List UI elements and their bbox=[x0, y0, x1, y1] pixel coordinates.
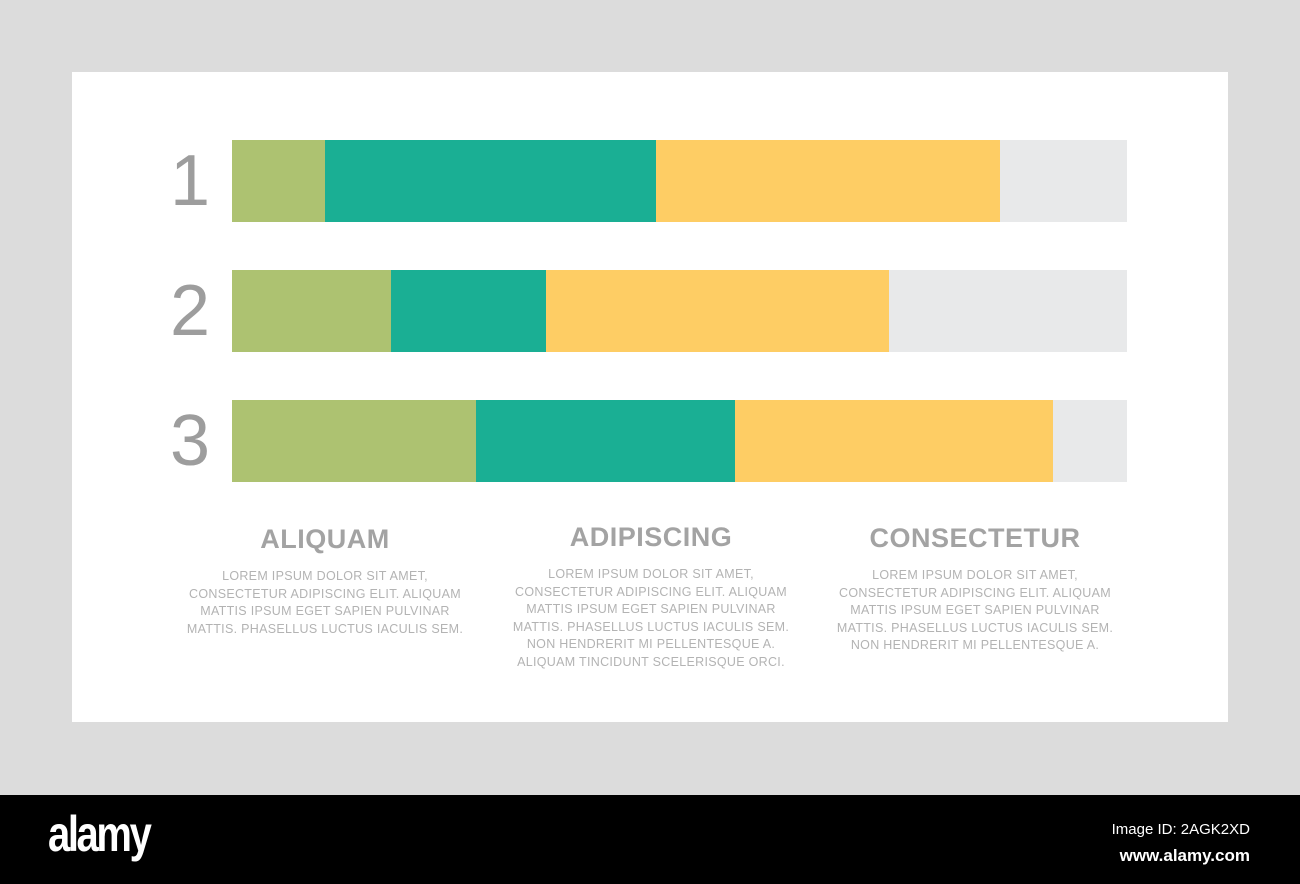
text block: aliquam bbox=[187, 524, 463, 636]
text block: consectetur bbox=[837, 523, 1113, 652]
bar 2 bbox=[232, 270, 1127, 352]
text block: adipiscing: MATTIS. PHASELLUS LUCTUS IACULIS SEM. bbox=[513, 620, 789, 634]
text block: consectetur: CONSECTETUR bbox=[869, 523, 1080, 553]
text block: consectetur: NON HENDRERIT MI PELLENTESQUE A. bbox=[851, 638, 1099, 652]
text block: aliquam: LOREM IPSUM DOLOR SIT AMET, bbox=[222, 569, 428, 583]
number 1: 1 bbox=[170, 141, 210, 221]
text block: adipiscing: ADIPISCING bbox=[570, 522, 732, 552]
text block: consectetur: MATTIS IPSUM EGET SAPIEN PULVINAR bbox=[850, 603, 1100, 617]
text block: adipiscing bbox=[513, 522, 789, 668]
text block: aliquam: ALIQUAM bbox=[260, 524, 390, 554]
bar 1 bbox=[232, 140, 1127, 222]
text block: adipiscing: MATTIS IPSUM EGET SAPIEN PULVINAR bbox=[526, 602, 776, 616]
image id: Image ID: 2AGK2XD bbox=[1112, 821, 1250, 838]
text block: consectetur: LOREM IPSUM DOLOR SIT AMET, bbox=[872, 568, 1078, 582]
number 3: 3 bbox=[170, 401, 210, 481]
text block: adipiscing: ALIQUAM TINCIDUNT SCELERISQUE ORCI. bbox=[517, 654, 785, 668]
text block: aliquam: CONSECTETUR ADIPISCING ELIT. ALIQUAM bbox=[189, 586, 461, 600]
white panel bbox=[72, 72, 1228, 722]
text block: adipiscing: LOREM IPSUM DOLOR SIT AMET, bbox=[548, 567, 754, 581]
bar 3 bbox=[232, 400, 1127, 482]
number 2: 2 bbox=[170, 271, 210, 351]
image id: www.alamy.com bbox=[1120, 846, 1250, 865]
logo: alamy bbox=[48, 806, 149, 862]
text block: consectetur: MATTIS. PHASELLUS LUCTUS IACULIS SEM. bbox=[837, 620, 1113, 634]
text block: adipiscing: NON HENDRERIT MI PELLENTESQUE A. bbox=[527, 637, 775, 651]
text block: aliquam: MATTIS IPSUM EGET SAPIEN PULVINAR bbox=[200, 604, 450, 618]
text block: consectetur: CONSECTETUR ADIPISCING ELIT. ALIQUAM bbox=[839, 586, 1111, 600]
footer bar bbox=[0, 795, 1300, 884]
text block: aliquam: MATTIS. PHASELLUS LUCTUS IACULIS SEM. bbox=[187, 622, 463, 636]
image id bbox=[1112, 821, 1250, 865]
text block: adipiscing: CONSECTETUR ADIPISCING ELIT. ALIQUAM bbox=[515, 584, 787, 598]
